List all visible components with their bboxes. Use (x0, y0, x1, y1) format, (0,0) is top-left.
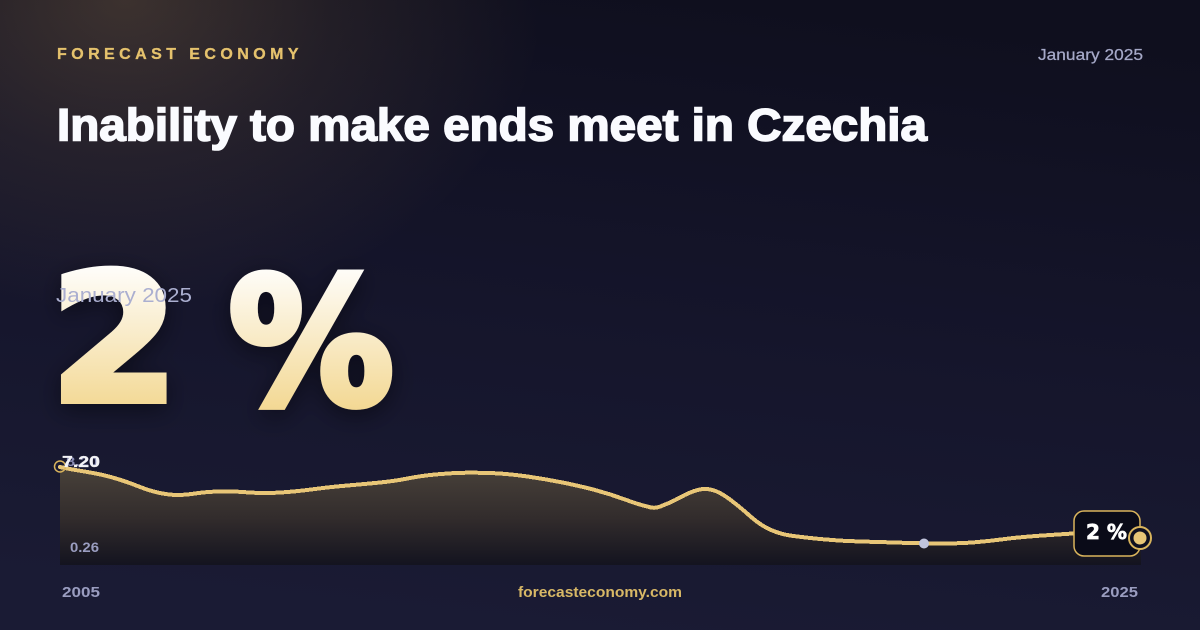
start marker (54, 461, 66, 472)
axis start year: 2005 (62, 584, 100, 601)
chart line (60, 467, 1073, 544)
max label: 7.20 (62, 454, 100, 471)
current value badge: 2 % (1086, 520, 1127, 544)
big value (50, 236, 394, 445)
end marker (1129, 527, 1151, 549)
value date overlay: January 2025 (56, 285, 192, 307)
big value: 2 (50, 236, 179, 442)
chart area fill (60, 467, 1141, 565)
big value: % (229, 242, 394, 445)
area chart (54, 454, 1151, 565)
max label shadow: 8.20 (66, 454, 98, 469)
brand label: FORECAST ECONOMY (57, 46, 299, 63)
axis end year: 2025 (1101, 584, 1138, 601)
date top right: January 2025 (1038, 47, 1143, 64)
source url: forecasteconomy.com (518, 584, 682, 601)
min label: 0.26 (70, 539, 99, 555)
minimum marker (919, 538, 929, 548)
current value badge (1074, 511, 1140, 556)
title: Inability to make ends meet in Czechia (57, 100, 928, 150)
